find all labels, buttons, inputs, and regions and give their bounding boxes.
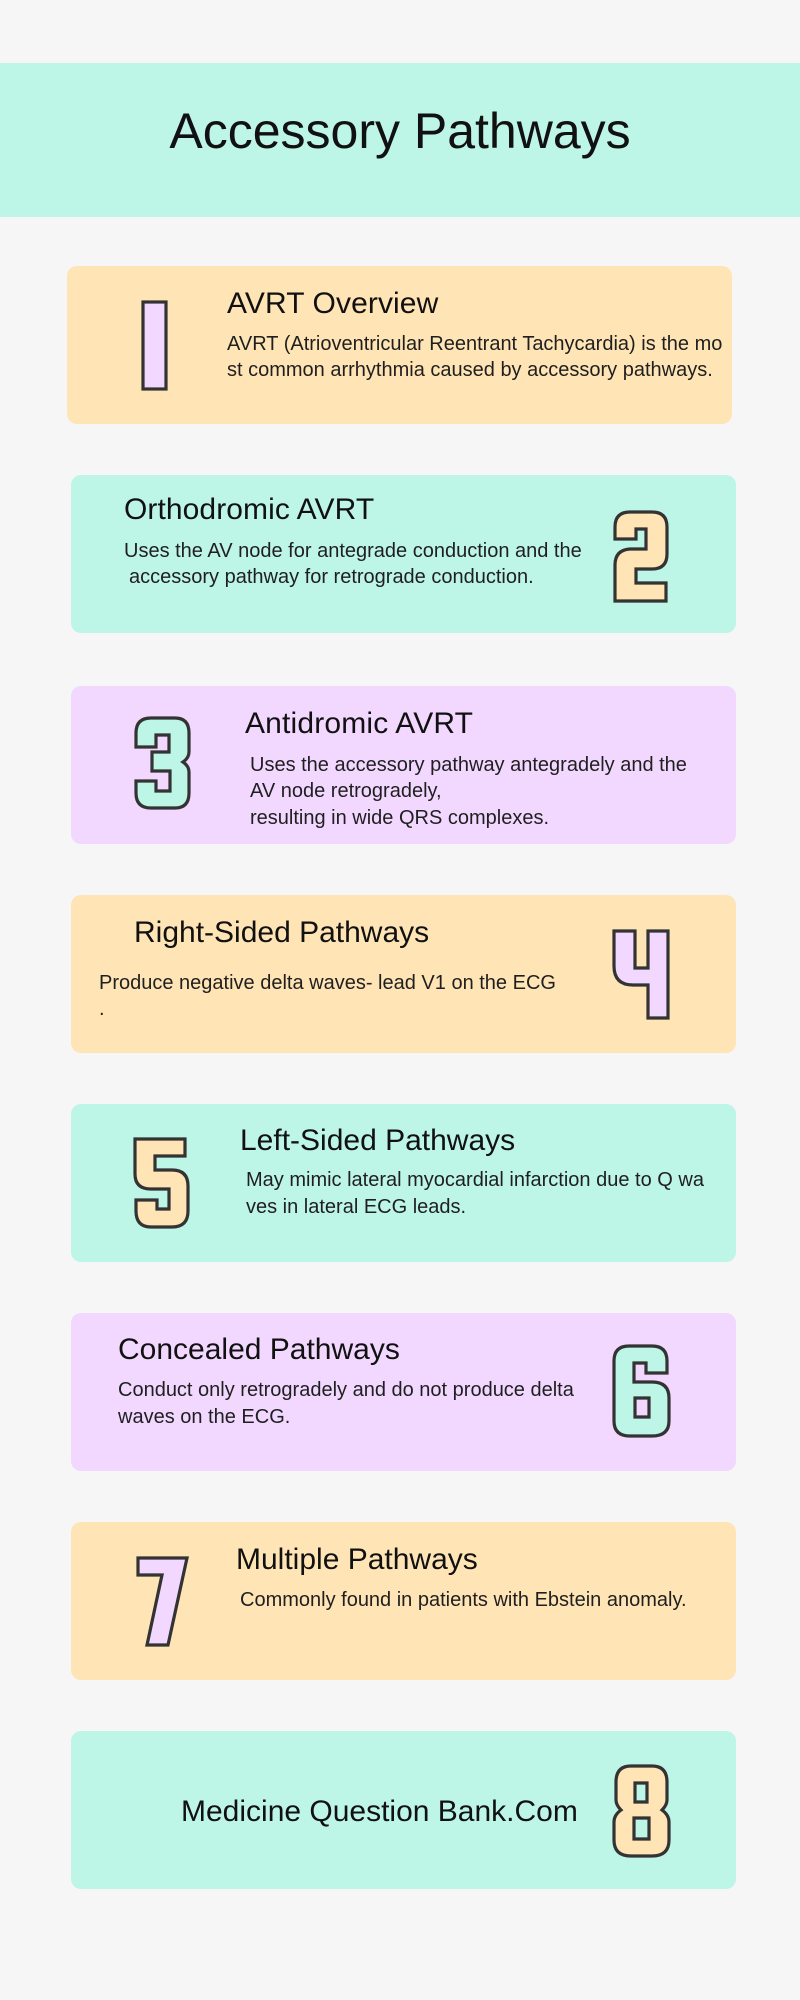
heading: Concealed Pathways: Concealed Pathways	[118, 1333, 400, 1366]
panel: Antidromic AVRT	[71, 686, 736, 844]
text: Antidromic body: Uses the accessory pathway antegradely and the	[250, 754, 687, 776]
number 7	[138, 1558, 187, 1645]
number 2	[615, 512, 667, 601]
text: Left-sided body: ves in lateral ECG leads.	[246, 1196, 466, 1218]
text: Multiple pathways body: Commonly found in patients with Ebstein anomaly.	[240, 1589, 687, 1611]
text: Orthodromic body: Uses the AV node for antegrade conduction and the	[124, 540, 582, 562]
text: Antidromic body: AV node retrogradely,	[250, 780, 442, 802]
heading: AVRT Overview: AVRT Overview	[227, 287, 439, 320]
panel: Medicine Question Bank footer	[71, 1731, 736, 1889]
header banner	[0, 63, 800, 217]
number 8	[614, 1766, 669, 1856]
title: Accessory Pathways	[169, 103, 631, 159]
text: Left-sided body: May mimic lateral myocardial infarction due to Q wa	[246, 1169, 705, 1191]
number 1	[143, 302, 166, 389]
number 5	[135, 1139, 188, 1227]
number 6	[614, 1346, 669, 1436]
text: AVRT overview body: st common arrhythmia caused by accessory pathways.	[227, 359, 713, 381]
number 3	[136, 718, 189, 808]
panel: Right-Sided Pathways	[71, 895, 736, 1053]
text: Orthodromic body: accessory pathway for retrograde conduction.	[129, 566, 534, 588]
heading: Orthodromic AVRT: Orthodromic AVRT	[124, 493, 374, 526]
heading: Multiple Pathways: Multiple Pathways	[236, 1543, 478, 1576]
heading: Right-Sided Pathways: Right-Sided Pathways	[134, 916, 429, 949]
panel: Concealed Pathways	[71, 1313, 736, 1471]
text: Right-sided body: .	[99, 998, 105, 1020]
text: Right-sided body: Produce negative delta waves- lead V1 on the ECG	[99, 972, 556, 994]
panel: Multiple Pathways	[71, 1522, 736, 1680]
text: Concealed body: Conduct only retrogradely and do not produce delta	[118, 1379, 575, 1401]
heading: Left-Sided Pathways: Left-Sided Pathways	[240, 1124, 515, 1157]
text: Antidromic body: resulting in wide QRS complexes.	[250, 807, 549, 829]
heading: Antidromic AVRT: Antidromic AVRT	[245, 707, 473, 740]
panel: Left-Sided Pathways	[71, 1104, 736, 1262]
text: AVRT overview body: AVRT (Atrioventricular Reentrant Tachycardia) is the mo	[227, 333, 722, 355]
text: Concealed body: waves on the ECG.	[117, 1406, 290, 1428]
text: Medicine Question Bank.Com: Medicine Question Bank.Com	[181, 1795, 578, 1828]
panel: AVRT overview	[67, 266, 732, 424]
panel: Orthodromic AVRT	[71, 475, 736, 633]
number 4	[614, 931, 668, 1018]
